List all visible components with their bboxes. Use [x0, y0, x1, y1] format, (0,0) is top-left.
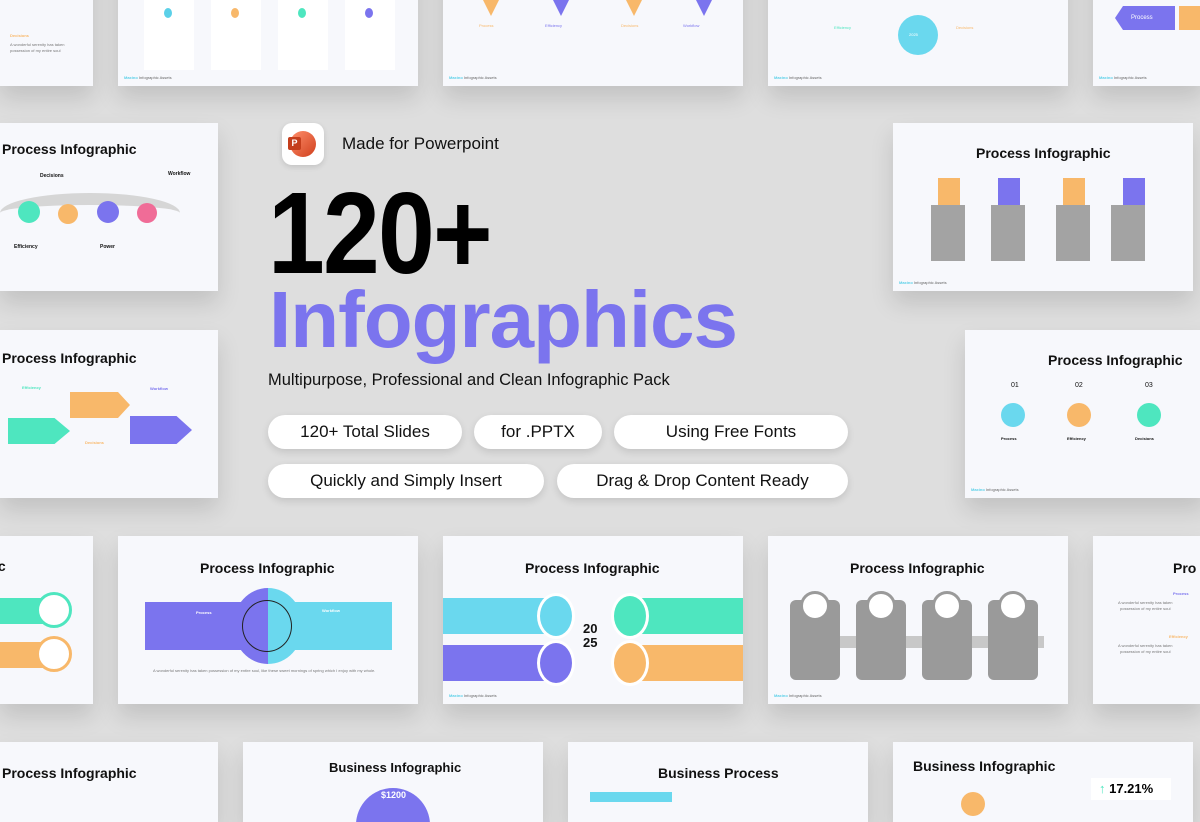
slide: row2 left wave: Decisions [40, 173, 64, 179]
pill: pptx [474, 415, 602, 449]
slide: row5 d: Business Infographic [913, 758, 1055, 774]
slide: row4 e: Process [1173, 591, 1189, 596]
pill: pptx: for .PPTX [501, 422, 575, 441]
slide: row1 d [768, 0, 1068, 86]
slide: row1 a: possession of my entire soul [10, 48, 60, 53]
slide: row2 right arrows: Maxino Infographic Assets [899, 280, 947, 285]
slide: row2 left wave: Process Infographic [2, 141, 137, 157]
slide: row4 b: Process [196, 610, 212, 615]
slide: row4 b: A wonderful serenity has taken possession of my entire soul, like these sweet mornings of spring which I enjoy with my whole. [153, 668, 375, 673]
slide: row5 b: Business Infographic [329, 760, 461, 775]
slide: row3 left arrows: Process Infographic [2, 350, 137, 366]
slide: row2 left wave: Efficiency [14, 244, 38, 250]
slide: row1 d: Decisions [956, 25, 973, 30]
slide: row5 d: ↑ 17.21% [1099, 781, 1153, 796]
slide: row5 b: $1200 [381, 790, 406, 800]
slide: row3 right: Maxino Infographic Assets [971, 487, 1019, 492]
slide: row3 right: 03 [1145, 382, 1153, 389]
slide: row1 d: Efficiency [834, 25, 851, 30]
pill: free fonts [614, 415, 848, 449]
subtitle: Multipurpose, Professional and Clean Infographic Pack [268, 371, 670, 389]
slide: row1 c [443, 0, 743, 86]
slide: row3 left arrows: Workflow [150, 386, 168, 391]
slide: row1 c: Workflow [683, 23, 699, 28]
slide: row5 c [568, 742, 868, 822]
slide: row1 c: Decisions [621, 23, 638, 28]
slide: row3 right: Decisions [1135, 436, 1154, 441]
slide: row4 e [1093, 536, 1200, 704]
pill: drag drop: Drag & Drop Content Ready [596, 471, 809, 490]
slide: row4 a [0, 536, 93, 704]
slide: row2 left wave: Power [100, 244, 115, 250]
slide: row1 e: Maxino Infographic Assets [1099, 75, 1147, 80]
slide: row1 a: A wonderful serenity has taken [10, 42, 64, 47]
slide: row1 e: Process [1131, 15, 1153, 21]
pill: drag drop [557, 464, 848, 498]
pill: total slides [268, 415, 462, 449]
slide: row3 left arrows: Efficiency [22, 385, 41, 390]
slide: row3 left arrows [0, 330, 218, 498]
slide: row4 e: possession of my entire soul [1120, 606, 1170, 611]
label: made for powerpoint: Made for Powerpoint [342, 134, 499, 153]
pill: insert: Quickly and Simply Insert [310, 471, 502, 490]
slide: row3 right: 02 [1075, 382, 1083, 389]
slide: row3 right: Process [1001, 436, 1017, 441]
headline: Infographics: Infographics [269, 275, 737, 364]
slide: row4 e: possession of my entire soul [1120, 649, 1170, 654]
slide: row2 left wave [0, 123, 218, 291]
slide: row1 c: Maxino Infographic Assets [449, 75, 497, 80]
slide: row4 b: Process Infographic [200, 560, 335, 576]
slide: row5 b [243, 742, 543, 822]
slide: row4 c [443, 536, 743, 704]
slide: row4 e: A wonderful serenity has taken [1118, 600, 1172, 605]
pill: free fonts: Using Free Fonts [666, 422, 796, 441]
icon: powerpoint: P [291, 138, 298, 148]
slide: row4 d: Process Infographic [850, 560, 985, 576]
slide: row1 d: Maxino Infographic Assets [774, 75, 822, 80]
pill: total slides: 120+ Total Slides [300, 422, 430, 441]
slide: row4 e: A wonderful serenity has taken [1118, 643, 1172, 648]
slide: row4 e: Efficiency [1169, 634, 1188, 639]
pill: insert [268, 464, 544, 498]
slide: row1 c: Efficiency [545, 23, 562, 28]
slide: row1 a [0, 0, 93, 86]
slide: row4 e: Pro [1173, 560, 1196, 576]
slide: row2 left wave: Workflow [168, 171, 190, 177]
slide: row5 c: Business Process [658, 765, 779, 781]
slide: row4 c: Process Infographic [525, 560, 660, 576]
slide: row4 d: Maxino Infographic Assets [774, 693, 822, 698]
slide: row2 right arrows [893, 123, 1193, 291]
slide: row4 d [768, 536, 1068, 704]
slide: row3 right: 01 [1011, 382, 1019, 389]
slide: row3 left arrows: Decisions [85, 440, 104, 445]
slide: row3 right: Process Infographic [1048, 352, 1183, 368]
slide: row1 b: Maxino Infographic Assets [124, 75, 172, 80]
slide: row1 e [1093, 0, 1200, 86]
slide: row4 c: 25 [583, 635, 597, 650]
slide: row2 right arrows: Process Infographic [976, 145, 1111, 161]
slide: row5 a [0, 742, 218, 822]
slide: row1 a: Decisions [10, 33, 29, 38]
slide: row4 b: Workflow [322, 608, 340, 613]
slide: row5 a: Process Infographic [2, 765, 137, 781]
slide: row4 c: 20 [583, 621, 597, 636]
slide: row4 c: Maxino Infographic Assets [449, 693, 497, 698]
slide: row1 b [118, 0, 418, 86]
icon: powerpoint [282, 123, 324, 165]
slide: row4 b [118, 536, 418, 704]
slide: row3 right: Efficiency [1067, 436, 1086, 441]
headline: 120+: 120+ [268, 168, 491, 298]
slide: row1 d: 2025 [909, 32, 918, 37]
slide: row5 d [893, 742, 1193, 822]
slide: row1 c: Process [479, 23, 493, 28]
slide: row3 right [965, 330, 1200, 498]
